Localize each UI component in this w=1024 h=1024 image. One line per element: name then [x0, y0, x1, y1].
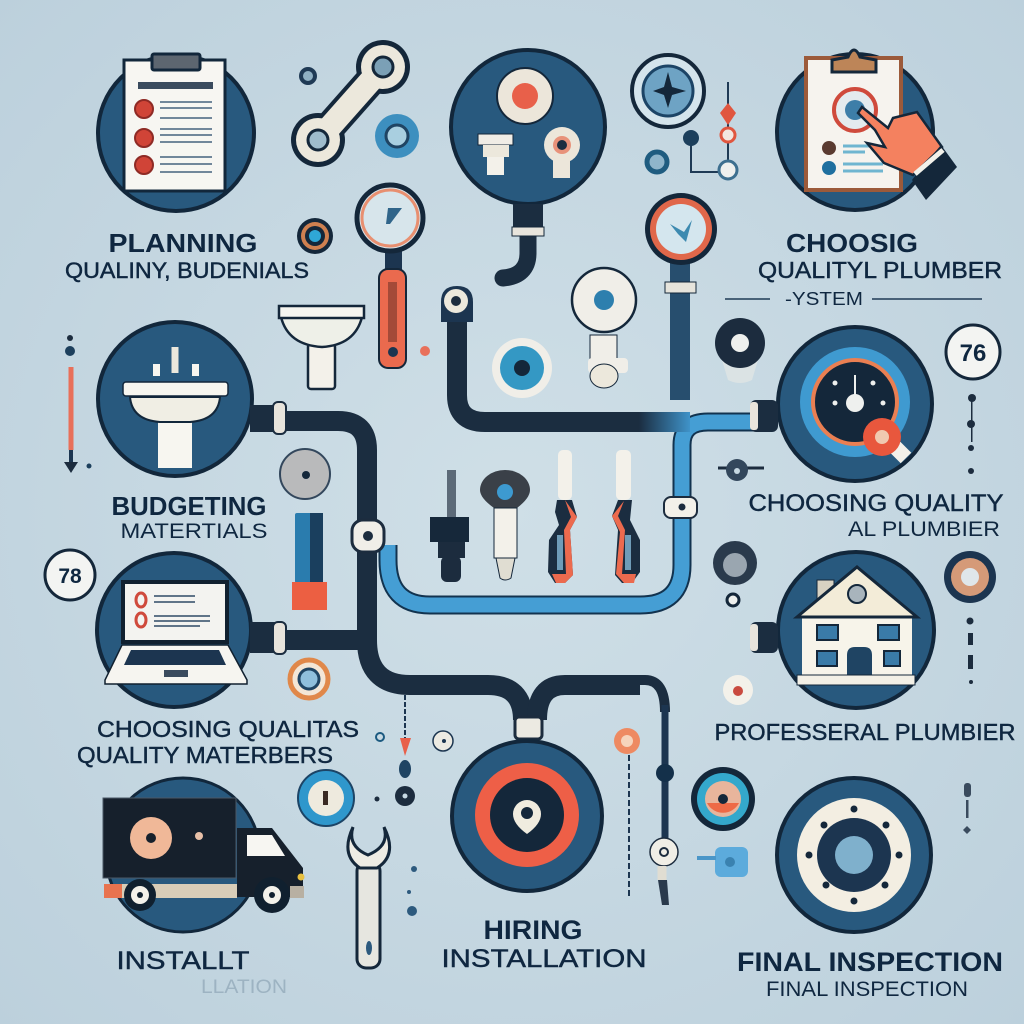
- icon: right column markers: [966, 618, 974, 684]
- icon: orange ring center bottom: [614, 728, 640, 754]
- badge: 76: [946, 325, 1000, 379]
- panel: budgeting: [98, 322, 252, 476]
- text: planning subtitle: QUALINY, BUDENIALS: [65, 258, 309, 283]
- icon: basin small: [279, 306, 364, 389]
- icon: small fitting right: [715, 318, 765, 383]
- heading: final inspection: FINAL INSPECTION: [737, 947, 1003, 977]
- icon: small ring left: [376, 733, 384, 741]
- icon: spanner bottom: [348, 827, 390, 968]
- panel: house: [778, 552, 934, 708]
- icon: sink: [123, 347, 228, 468]
- pipe: central stem: [503, 227, 544, 278]
- text: plumber: AL PLUMBIER: [848, 518, 1000, 541]
- icon: dark connector: [374, 738, 415, 806]
- badge: left number: 78: [58, 565, 82, 588]
- icon: small blue ring: [375, 114, 419, 158]
- icon: tool 3: [548, 450, 577, 583]
- text: faded installation: LLATION: [201, 977, 287, 998]
- icon: small disc: [280, 449, 330, 499]
- icon: bottom small ring: [433, 731, 453, 751]
- icon: pipe collar: [352, 520, 384, 552]
- icon: magnifier: [357, 185, 423, 368]
- panel: hiring valve: [452, 717, 602, 891]
- text: materials: MATERTIALS: [120, 520, 268, 543]
- icon: gauge right of centre: [645, 193, 717, 293]
- icon: bottle: [292, 513, 327, 610]
- decoration: right dots: [967, 394, 976, 474]
- heading: choosing: CHOOSIG: [786, 228, 918, 258]
- icon: pipe bead dots: [407, 866, 417, 916]
- icon: red ring: [723, 675, 753, 705]
- icon: house pipe cap: [750, 622, 778, 653]
- panel: choosing plumber: [777, 50, 957, 210]
- icon: gauge bottom: [691, 767, 755, 831]
- icon: tool 1: [430, 470, 469, 582]
- icon: red dot: [420, 346, 430, 356]
- text: quality materbers: QUALITY MATERBERS: [77, 742, 333, 768]
- panel: planning: [98, 54, 254, 211]
- heading: hiring: HIRING: [484, 915, 582, 945]
- panel: final inspection: [777, 778, 931, 932]
- icon: gauge pipe cap: [750, 400, 778, 432]
- icon: pipe elbow gauge: [441, 286, 473, 322]
- icon: tool 4: [612, 450, 640, 583]
- tool set: [430, 450, 640, 583]
- icon: small gauge bottom: [298, 770, 354, 826]
- badge: 76: 76: [960, 340, 986, 367]
- icon: laptop pipe cap: [250, 622, 286, 654]
- icon: pipe valve bottom: [650, 764, 678, 905]
- icon: small ring top left: [301, 69, 315, 83]
- icon: blue key: [697, 847, 748, 877]
- icon: small eye marker: [727, 594, 739, 606]
- icon: small target: [297, 218, 333, 254]
- text: final inspection subtitle: FINAL INSPECTION: [766, 978, 968, 1001]
- icon: right bottom marker: [963, 783, 971, 834]
- text: system: -YSTEM: [785, 289, 863, 309]
- panel: laptop: [97, 553, 251, 707]
- heading: choosing qualitas: CHOOSING QUALITAS: [97, 716, 359, 742]
- heading: professeral plumber: PROFESSERAL PLUMBIER: [714, 719, 1016, 745]
- icon: pointing hand: [858, 107, 957, 200]
- text: installation: INSTALLATION: [442, 945, 646, 973]
- panel: central valve: [451, 50, 605, 228]
- icon: orange ring: [290, 660, 328, 698]
- icon: tool 2: [480, 470, 530, 580]
- panel: truck: [103, 778, 304, 932]
- stem pipe: [513, 204, 543, 228]
- icon: gauge top: [632, 55, 704, 127]
- icon: checklist: [124, 54, 225, 191]
- icon: small connectors top: [647, 82, 737, 179]
- badge: left number: [45, 550, 95, 600]
- panel: choosing quality gauge: [778, 327, 932, 481]
- heading: choosing quality: CHOOSING QUALITY: [748, 490, 1004, 517]
- pipe network: [278, 262, 760, 898]
- icon: gauge right: [944, 551, 996, 603]
- icon: dark fitting: [713, 541, 757, 585]
- arrow: left red: [64, 335, 92, 473]
- heading: budgeting: BUDGETING: [112, 491, 266, 521]
- text: quality plumber: QUALITYL PLUMBER: [758, 257, 1002, 283]
- icon: small connector: [718, 459, 764, 481]
- icon: pipe clip: [664, 497, 697, 518]
- heading: installt: INSTALLT: [116, 947, 250, 975]
- icon: spanner top: [291, 40, 410, 167]
- heading: planning: PLANNING: [108, 228, 258, 258]
- icon: sink pipe cap: [250, 402, 286, 434]
- icon: fitting: [572, 268, 636, 388]
- icon: blue disc: [492, 338, 552, 398]
